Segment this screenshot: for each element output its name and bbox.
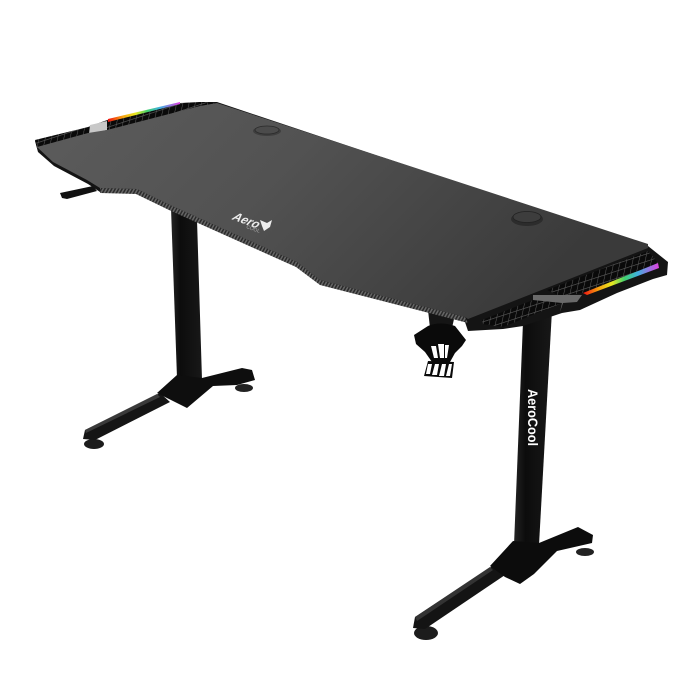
right foot base [490, 527, 593, 584]
cup holder basket [424, 361, 454, 378]
left cable grommet [253, 126, 281, 136]
cup holder arm [428, 310, 456, 328]
mat brand logo [229, 211, 272, 235]
left leg [83, 208, 255, 449]
underside frame [35, 102, 668, 331]
right column [514, 310, 552, 545]
left column [171, 208, 202, 380]
cup holder [414, 310, 466, 378]
right leg [413, 310, 594, 640]
right cable grommet [511, 212, 543, 226]
mat brand logo: COOL [245, 224, 261, 235]
leg brand text: AeroCool [525, 389, 540, 446]
right lower mesh tray [482, 300, 562, 327]
right control panel [533, 295, 582, 312]
right front foot arm [413, 565, 508, 629]
left front foot arm [83, 393, 170, 440]
left foot base [157, 368, 255, 408]
right back foot pad [576, 548, 594, 556]
left mesh tray [35, 102, 217, 148]
right rgb strip [583, 263, 659, 295]
mat brand logo: Aero [229, 211, 265, 231]
left rgb strip [108, 102, 180, 122]
cup holder bowl [414, 324, 466, 362]
desk mat [37, 103, 648, 319]
right upper mesh tray [547, 251, 658, 296]
left control label [89, 121, 107, 134]
right front foot pad [414, 626, 438, 640]
desk top [35, 102, 668, 331]
headset hook [60, 186, 97, 199]
front carbon edge [100, 188, 468, 323]
cup holder slots [426, 344, 452, 376]
logo mark [260, 220, 272, 231]
left back foot pad [235, 384, 253, 392]
left front foot pad [84, 439, 104, 449]
